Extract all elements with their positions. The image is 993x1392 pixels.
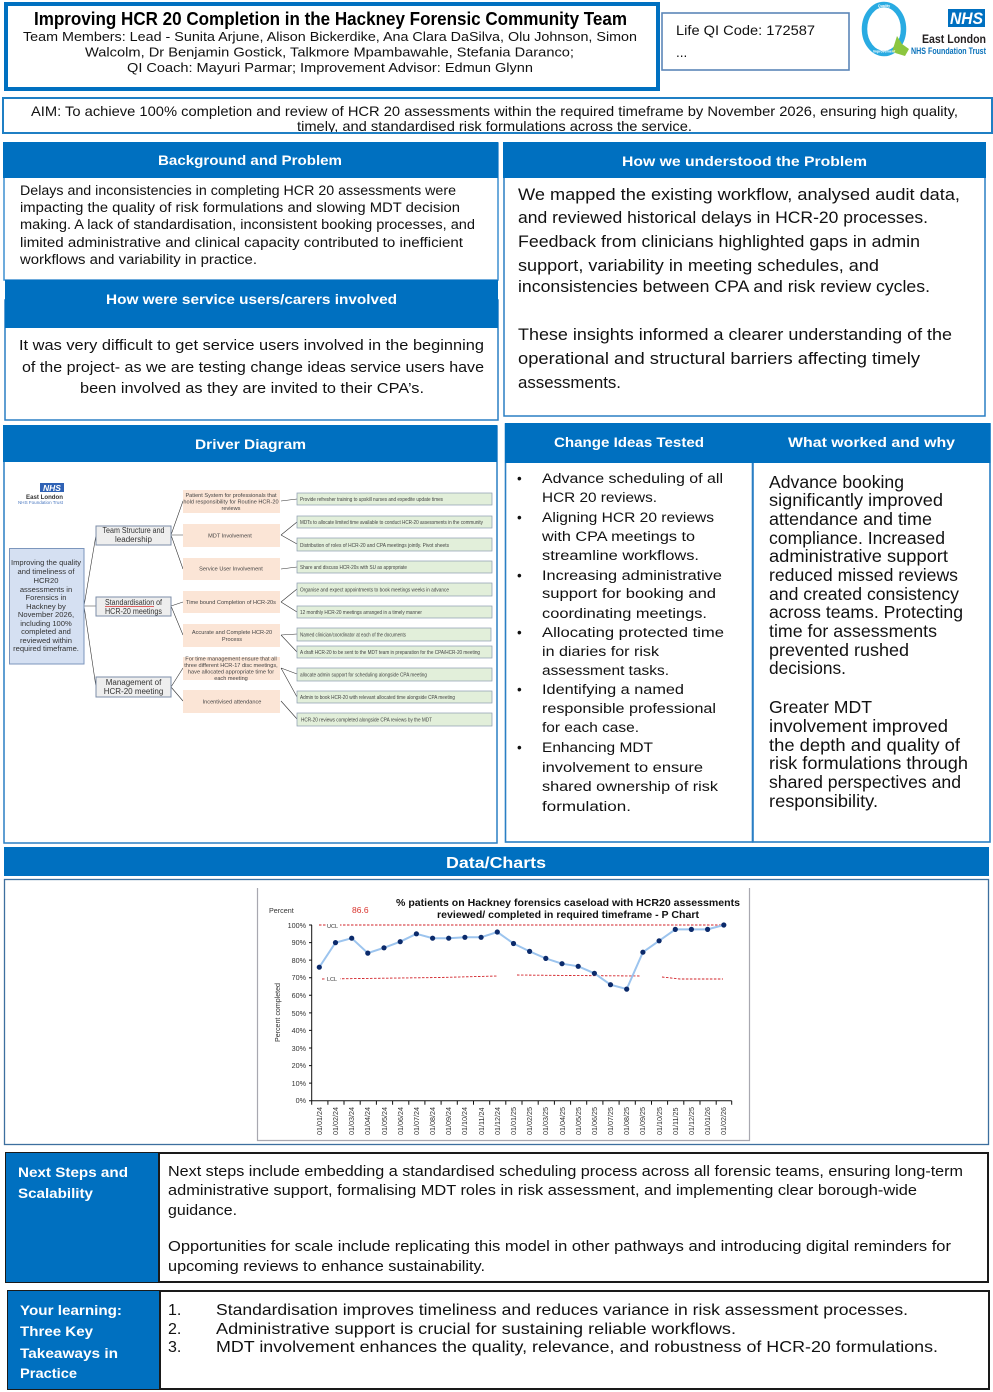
x axis labels: 01/05/24	[380, 1107, 389, 1135]
list: key takeaways: 1.	[168, 1302, 181, 1319]
text: what worked body: risk formulations through	[769, 753, 968, 773]
driver: aim box: and timeliness of	[18, 567, 75, 576]
secondary drivers: Patient System for professionals that	[185, 493, 277, 499]
panel: your learning	[8, 1291, 989, 1389]
y axis labels: 100%	[288, 921, 307, 930]
heading: next steps	[18, 1164, 128, 1201]
chart title: % patients on Hackney forensics caseload with HCR20 assessments	[396, 897, 740, 909]
heading: understood the problem: How we understood the Problem	[622, 153, 867, 169]
list: change ideas: formulation.	[542, 799, 631, 814]
aim statement: timely, and standardised risk formulations across the service.	[297, 118, 692, 134]
text: what worked body: Greater MDT	[769, 697, 872, 717]
list: change ideas: shared ownership of risk	[542, 779, 718, 794]
x axis labels: 01/10/25	[655, 1107, 664, 1135]
data points	[317, 922, 726, 992]
list: key takeaways: Standardisation improves timeliness and reduces variance in risk assessment processes.	[216, 1302, 908, 1319]
text: understood body	[518, 185, 960, 392]
panel: what worked and why	[752, 423, 990, 842]
change actions: Share and discuss HCR-20s with SU as appropriate	[300, 565, 407, 571]
x axis labels: 01/03/25	[541, 1107, 550, 1135]
x axis labels: 01/08/25	[622, 1107, 631, 1135]
change actions: A draft HCR-20 to be sent to the MDT team in preparation for the CPA/HCR-20 meeting	[300, 650, 480, 656]
y axis labels: 80%	[292, 956, 307, 965]
text: background body: Delays and inconsistencies in completing HCR 20 assessments were	[20, 183, 456, 198]
secondary drivers	[183, 490, 280, 713]
text: background body: workflows and variability in practice.	[19, 252, 257, 267]
list: key takeaways	[168, 1302, 938, 1356]
change actions: Provide refresher training to upskill nurses and expedite update times	[300, 497, 443, 503]
primary drivers	[96, 526, 171, 697]
text: what worked body: attendance and time	[769, 509, 932, 529]
x axis labels: 01/07/25	[606, 1107, 615, 1135]
heading: your learning: Takeaways in	[20, 1345, 118, 1361]
heading: data charts: Data/Charts	[446, 855, 546, 872]
text: what worked body: Advance booking	[769, 472, 904, 492]
text: background body	[19, 183, 475, 267]
x axis labels: 01/06/25	[590, 1107, 599, 1135]
axes	[309, 925, 732, 1105]
list: change ideas: in diaries for risk	[542, 644, 659, 659]
list: change ideas: Aligning HCR 20 reviews	[542, 510, 714, 525]
driver: aim box: completed and	[21, 627, 71, 636]
secondary drivers: Incentivised attendance	[203, 700, 261, 706]
text: understood body: We mapped the existing workflow, analysed audit data,	[518, 185, 960, 204]
list: change ideas: assessment tasks.	[542, 663, 669, 678]
icon: quality improvement Q logo: Improvement	[873, 50, 896, 54]
secondary drivers: have allocated appropriate time for	[188, 670, 274, 676]
change actions: Distribution of roles of HCR-20 and CPA meetings jointly. Pivot sheets	[300, 543, 449, 549]
heading: driver diagram: Driver Diagram	[195, 436, 306, 452]
primary drivers: Team Structure and	[102, 526, 164, 535]
driver: aim box: HCR20	[34, 576, 58, 585]
panel: background and problem	[3, 142, 498, 280]
list: change ideas: streamline workflows.	[542, 548, 699, 563]
list: change ideas: coordinating meetings.	[542, 606, 707, 621]
change actions: 12 monthly HCR-20 meetings arranged in a timely manner	[300, 610, 422, 616]
list: change ideas: Enhancing MDT	[542, 740, 653, 755]
secondary drivers: MDT Involvement	[208, 534, 252, 540]
logo: diagram NHS: NHS Foundation Trust	[18, 500, 64, 505]
driver: aim box: Improving the quality	[11, 558, 81, 567]
logo: NHS East London	[911, 9, 986, 56]
change actions: allocate admin support for scheduling alongside CPA meeting	[300, 672, 427, 678]
driver: aim box: including 100%	[20, 619, 72, 628]
logo: NHS East London: East London	[922, 32, 986, 46]
heading: your learning	[20, 1302, 122, 1381]
secondary drivers: hold responsibility for Routine HCR-20	[183, 500, 279, 506]
text: what worked body: time for assessments	[769, 621, 937, 641]
list: key takeaways: Administrative support is crucial for sustaining reliable workflows.	[216, 1321, 736, 1338]
text: what worked body: decisions.	[769, 658, 846, 678]
text: what worked body: reduced missed reviews	[769, 565, 958, 585]
list: change ideas: Increasing administrative	[542, 568, 722, 583]
text: next steps body	[168, 1164, 963, 1275]
list: change ideas: HCR 20 reviews.	[542, 490, 657, 505]
p chart: Percent	[269, 906, 294, 915]
team members	[23, 29, 637, 75]
text: what worked body: compliance. Increased	[769, 528, 945, 548]
text: background body: limited administrative and clinical capacity contributed to inefficient	[20, 235, 463, 250]
list: change ideas: •	[517, 740, 522, 755]
primary drivers: Management of	[106, 678, 162, 687]
text: understood body: inconsistencies between CPA and risk review cycles.	[518, 277, 930, 296]
text: next steps body: upcoming reviews to enhance sustainability.	[168, 1259, 485, 1275]
text: what worked body: administrative support	[769, 546, 948, 566]
aim statement	[3, 98, 992, 134]
primary drivers: HCR-20 meeting	[104, 687, 163, 696]
text: what worked body: responsibility.	[769, 791, 878, 811]
y axis labels: 20%	[292, 1061, 307, 1070]
primary drivers: HCR-20 meetings	[105, 607, 162, 616]
connector lines	[84, 499, 297, 719]
text: next steps body: guidance.	[168, 1203, 237, 1219]
text: next steps body: Next steps include embedding a standardised scheduling process across all forensic teams, ensuring long-term	[168, 1164, 963, 1180]
text: service users body	[19, 337, 484, 397]
text: understood body: and reviewed historical delays in HCR-20 processes.	[518, 208, 928, 227]
life QI code box	[662, 13, 849, 70]
chart title	[396, 897, 740, 921]
text: what worked body: involvement improved	[769, 716, 948, 736]
secondary drivers: Process	[222, 637, 242, 643]
list: change ideas: with CPA meetings to	[541, 529, 695, 544]
primary drivers: leadership	[115, 535, 153, 544]
text: what worked body: shared perspectives and	[769, 772, 961, 792]
x axis labels: 01/01/24	[315, 1107, 324, 1135]
panel: change ideas tested	[505, 423, 753, 842]
x axis labels: 01/02/25	[525, 1107, 534, 1135]
logo: diagram NHS: East London	[26, 494, 63, 501]
panel: data and charts	[4, 847, 989, 1144]
data line	[319, 925, 724, 989]
panel: driver diagram	[3, 425, 497, 843]
x axis labels: 01/05/25	[574, 1107, 583, 1135]
y axis title: Percent completed	[273, 983, 282, 1042]
x axis labels: 01/10/24	[460, 1107, 469, 1135]
y axis labels: 90%	[292, 938, 307, 947]
text: next steps body: administrative support, formalising MDT roles in risk assessment, and implementing clear borough-wide	[168, 1183, 917, 1199]
icon: quality improvement Q logo	[864, 4, 909, 56]
secondary drivers: For time management ensure that all	[185, 656, 277, 662]
logo: diagram NHS	[18, 483, 64, 505]
list: key takeaways: 3.	[168, 1339, 181, 1356]
x axis labels: 01/04/25	[558, 1107, 567, 1135]
text: understood body: assessments.	[518, 373, 621, 392]
text: what worked body: prevented rushed	[769, 640, 909, 660]
heading: next steps: Scalability	[18, 1185, 93, 1201]
heading: change ideas: Change Ideas Tested	[554, 434, 704, 450]
secondary drivers: each meeting	[214, 676, 248, 682]
driver: aim box: Forensics in	[26, 593, 66, 602]
text: service users body: of the project- as we are testing change ideas service users have	[22, 359, 484, 376]
text: service users body: been involved as they are invited to their CPA’s.	[80, 380, 424, 397]
list: key takeaways: MDT involvement enhances the quality, relevance, and robustness of HCR-20 formulations.	[216, 1339, 938, 1356]
list: change ideas: •	[517, 471, 522, 486]
secondary drivers: three different HCR-17 disc meetings,	[184, 663, 278, 669]
heading: next steps: Next Steps and	[18, 1164, 128, 1180]
panel: how we understood the problem	[503, 142, 986, 416]
x axis labels: 01/09/25	[638, 1107, 647, 1135]
team members: QI Coach: Mayuri Parmar; Improvement Advisor: Edmun Glynn	[127, 60, 533, 75]
x axis labels: 01/12/24	[493, 1107, 502, 1135]
list: change ideas: support for booking and	[542, 586, 716, 601]
icon: quality improvement Q logo: Quality	[878, 4, 890, 8]
text: next steps body: Opportunities for scale include replicating this model in other pathways and introducing digital reminders for	[168, 1239, 951, 1255]
p chart: UCL	[327, 924, 338, 930]
x axis labels: 01/07/24	[412, 1107, 421, 1135]
heading: service users: How were service users/carers involved	[106, 291, 397, 307]
panel: service users and carers involvement	[5, 280, 498, 420]
y axis labels: 10%	[292, 1079, 307, 1088]
text: background body: making. A lack of standardisation, inconsistent booking processes, and	[20, 217, 475, 232]
driver: aim box: assessments in	[20, 585, 72, 594]
heading: background and problem: Background and Problem	[158, 152, 342, 168]
x axis labels: 01/11/25	[671, 1108, 680, 1135]
y axis labels	[288, 921, 307, 1105]
driver: aim box: Hackney by	[26, 602, 66, 611]
text: service users body: It was very difficult to get service users involved in the beginning	[19, 337, 484, 354]
heading: your learning: Three Key	[20, 1323, 93, 1339]
aim statement: AIM: To achieve 100% completion and review of HCR 20 assessments within the required timeframe by November 2026, ensuring high quality,	[31, 103, 958, 119]
p chart: LCL	[327, 977, 337, 983]
x axis labels	[315, 1107, 728, 1135]
primary drivers: Standardisation of	[105, 598, 163, 607]
list: change ideas: •	[517, 510, 522, 525]
secondary drivers: reviews	[222, 506, 241, 512]
x axis labels: 01/03/24	[347, 1107, 356, 1135]
list: change ideas: •	[517, 568, 522, 583]
driver: aim box: required timeframe.	[13, 644, 79, 653]
list: change ideas: Allocating protected time	[542, 625, 724, 640]
secondary drivers: Service User Involvement	[199, 566, 263, 572]
driver: aim box	[10, 548, 84, 664]
change actions: Admin to book HCR-20 with relevant allocated time alongside CPA meeting	[300, 695, 455, 701]
text: understood body: support, variability in meeting schedules, and	[518, 256, 879, 275]
list: change ideas: •	[517, 625, 522, 640]
y axis labels: 60%	[292, 991, 307, 1000]
change actions: Organise and expect appointments to book meetings weeks in advance	[300, 588, 449, 594]
list: change ideas: Identifying a named	[542, 682, 684, 697]
list: change ideas: for each case.	[542, 720, 639, 735]
y axis labels: 30%	[292, 1044, 307, 1053]
p chart	[257, 888, 750, 1143]
list: change ideas	[517, 471, 724, 814]
life QI code box: Life QI Code: 172587	[676, 23, 815, 38]
title block	[6, 4, 658, 89]
x axis labels: 01/12/25	[687, 1107, 696, 1135]
x axis labels: 01/08/24	[428, 1107, 437, 1135]
heading: your learning: Practice	[20, 1365, 77, 1381]
panel: next steps and scalability	[6, 1153, 988, 1282]
text: background body: impacting the quality of risk formulations and slowing MDT decision	[20, 200, 460, 215]
change actions: HCR-20 reviews completed alongside CPA reviews by the MDT	[301, 718, 433, 724]
y axis labels: 70%	[292, 973, 307, 982]
x axis labels: 01/06/24	[396, 1107, 405, 1135]
team members: Team Members: Lead - Sunita Arjune, Alison Bickerdike, Ana Clara DaSilva, Olu Johnson, Simon	[23, 29, 637, 44]
logo: diagram NHS: NHS	[43, 483, 61, 493]
secondary drivers: Time bound Completion of HCR-20s	[186, 600, 276, 606]
text: what worked body: and created consistency	[769, 584, 959, 604]
text: understood body: operational and structural barriers affecting timely	[518, 349, 921, 368]
x axis labels: 01/01/26	[703, 1107, 712, 1135]
title: Improving HCR 20 Completion in the Hackney Forensic Community Team	[34, 9, 627, 29]
heading: what worked: What worked and why	[788, 434, 955, 450]
heading: your learning: Your learning:	[20, 1302, 122, 1318]
x axis labels: 01/02/26	[719, 1107, 728, 1135]
secondary drivers: Accurate and Complete HCR-20	[192, 630, 272, 636]
change actions: MDTs to allocate limited time available to conduct HCR-20 assessments in the community	[300, 520, 483, 526]
driver: aim box: November 2026,	[18, 610, 74, 619]
list: change ideas: •	[517, 682, 522, 697]
text: what worked body: significantly improved	[769, 490, 943, 510]
text: what worked body	[769, 472, 968, 811]
driver: aim box: reviewed within	[20, 636, 72, 645]
list: change ideas: involvement to ensure	[542, 760, 703, 775]
p chart: 86.6	[352, 905, 369, 915]
change actions	[297, 493, 492, 726]
x axis labels: 01/09/24	[444, 1107, 453, 1135]
x axis labels: 01/11/24	[477, 1108, 486, 1135]
life QI code box: ...	[676, 45, 687, 60]
change actions: Named clinician/coordinator at each of the documents	[300, 632, 406, 638]
list: change ideas: Advance scheduling of all	[542, 471, 723, 486]
text: what worked body: the depth and quality of	[769, 735, 960, 755]
y axis labels: 50%	[292, 1009, 307, 1018]
text: understood body: Feedback from clinicians highlighted gaps in admin	[518, 232, 920, 251]
list: change ideas: responsible professional	[542, 701, 716, 716]
chart title: reviewed/ completed in required timeframe - P Chart	[437, 909, 699, 921]
x axis labels: 01/01/25	[509, 1107, 518, 1135]
control limits	[319, 925, 724, 979]
x axis labels: 01/04/24	[363, 1107, 372, 1135]
list: key takeaways: 2.	[168, 1321, 181, 1338]
x axis labels: 01/02/24	[331, 1107, 340, 1135]
y axis labels: 0%	[296, 1096, 307, 1105]
team members: Walcolm, Dr Benjamin Gostick, Talkmore Mpambawahle, Stefania Daranco;	[85, 44, 574, 60]
logo: NHS East London: NHS	[950, 9, 984, 28]
text: understood body: These insights informed a clearer understanding of the	[518, 325, 952, 344]
text: what worked body: across teams. Protecting	[769, 602, 963, 622]
y axis labels: 40%	[292, 1026, 307, 1035]
